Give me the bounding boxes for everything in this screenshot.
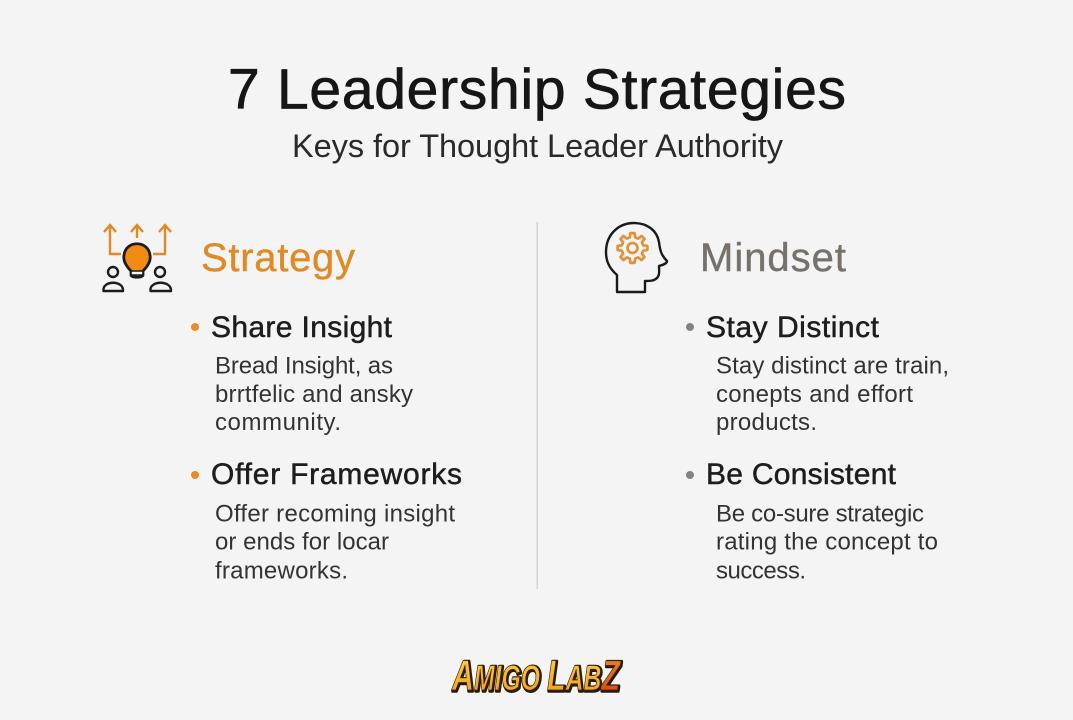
- item: be consistent: success.: [716, 558, 806, 584]
- title: 7 Leadership Strategies: [228, 58, 846, 122]
- item: share insight: Share Insight: [211, 311, 393, 344]
- heading: strategy: Strategy: [201, 236, 355, 280]
- item: share insight: Bread Insight, as: [215, 352, 393, 380]
- item: share insight: brrtfelic and ansky: [215, 381, 413, 408]
- item: share insight: [191, 311, 413, 436]
- item: share insight: community.: [215, 409, 341, 436]
- item: be consistent: Be co-sure strategic: [716, 500, 924, 528]
- item: be consistent: rating the concept to: [716, 528, 938, 556]
- item: stay distinct: [686, 311, 949, 436]
- panel: mindset: [606, 223, 949, 584]
- logo: Amigo Labz: AMIGO LABZ: [451, 652, 621, 700]
- panel: strategy: [103, 225, 462, 584]
- icon: head with gear: [606, 223, 667, 292]
- item: offer frameworks: [191, 458, 462, 584]
- item: be consistent: Be Consistent: [706, 458, 897, 491]
- item: stay distinct: conepts and effort: [716, 381, 913, 408]
- item: stay distinct: products.: [716, 409, 817, 436]
- item: stay distinct: Stay Distinct: [706, 311, 880, 344]
- divider: [536, 222, 538, 589]
- item: offer frameworks: frameworks.: [215, 558, 348, 584]
- logo: Amigo Labz: AMIGO LABZ: [452, 653, 622, 701]
- item: offer frameworks: or ends for locar: [215, 528, 389, 556]
- item: offer frameworks: Offer recoming insight: [215, 500, 455, 528]
- item: be consistent: [686, 458, 938, 584]
- item: offer frameworks: Offer Frameworks: [211, 458, 462, 491]
- heading: mindset: Mindset: [700, 236, 846, 280]
- item: stay distinct: Stay distinct are train,: [716, 352, 949, 380]
- icon: lightbulb with people and arrows: [103, 225, 171, 291]
- subtitle: Keys for Thought Leader Authority: [292, 128, 784, 164]
